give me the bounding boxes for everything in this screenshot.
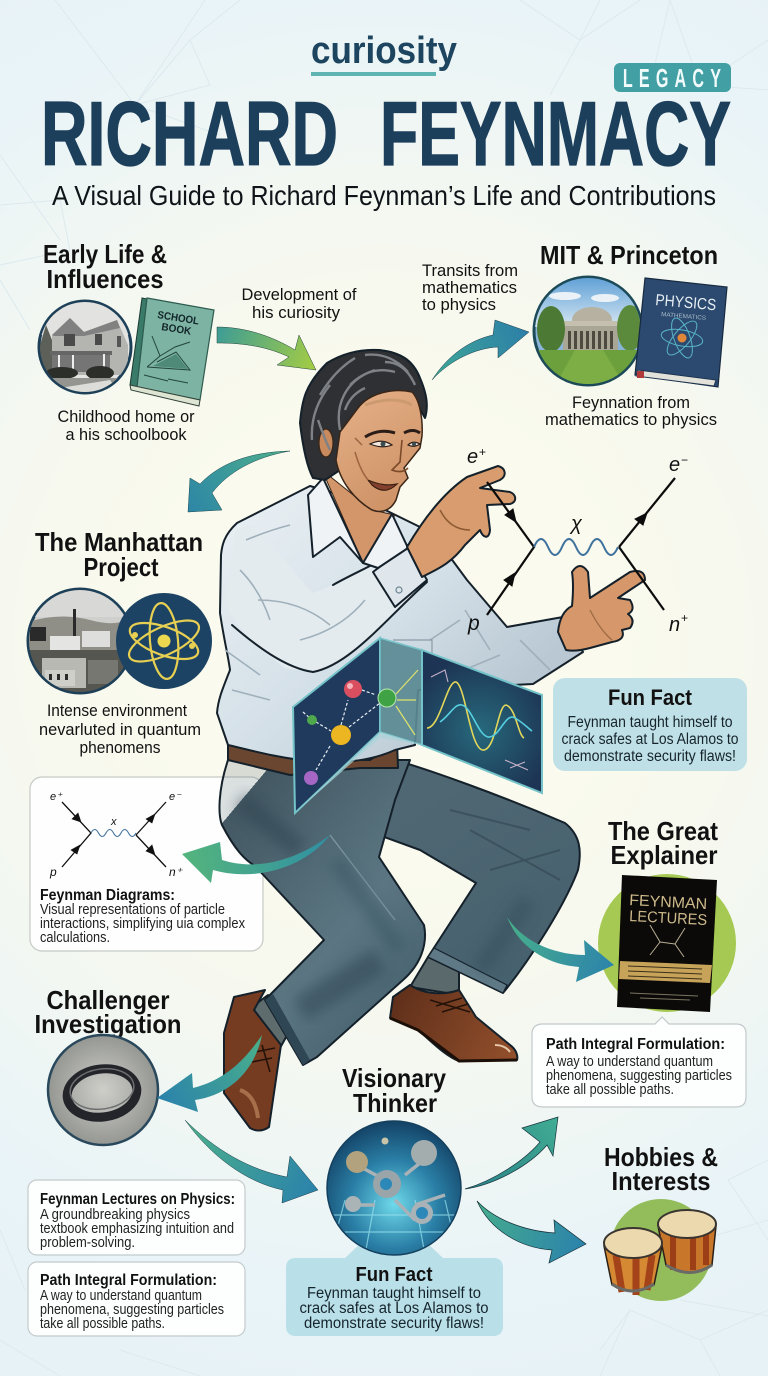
heading: visionary — [342, 1063, 446, 1118]
card: Path Integral Formulation right: take all possible paths. — [546, 1081, 674, 1098]
callout: fun fact lower — [286, 1242, 503, 1336]
hologram panel — [293, 638, 542, 813]
callout: fun fact upper: Fun Fact — [608, 685, 693, 710]
neck — [322, 470, 395, 563]
section: Manhattan Project — [28, 527, 212, 757]
icon: nanobot sphere — [327, 1121, 461, 1255]
card: Feynman Diagrams — [30, 777, 263, 951]
card: Feynman Lectures on Physics — [28, 1180, 245, 1255]
card: Feynman Lectures on Physics: A groundbreaking physics — [40, 1206, 190, 1223]
heading: visionary: Visionary — [342, 1063, 446, 1093]
belt — [228, 742, 398, 775]
near leg and foot — [220, 760, 425, 1130]
chart: large Feynman diagram: n — [669, 614, 680, 636]
caption: childhood home — [58, 407, 195, 444]
card: Path Integral Formulation left: A way to understand quantum — [40, 1287, 202, 1304]
far leg — [365, 760, 580, 1061]
caption: development of curiosity — [242, 285, 357, 322]
heading: great explainer: The Great — [608, 816, 718, 846]
caption: intense environment: phenomens — [80, 738, 160, 757]
chart: large Feynman diagram: + — [681, 611, 688, 625]
callout: fun fact lower: Fun Fact — [356, 1264, 433, 1286]
text: Feynman Diagrams description: Feynman Diagrams: — [40, 887, 175, 904]
caption: transits: to physics — [422, 295, 496, 314]
card: Path Integral Formulation right — [532, 1017, 746, 1107]
icon: bongo drums — [604, 1210, 716, 1295]
heading: visionary: Thinker — [353, 1088, 437, 1118]
icon: atom — [116, 593, 212, 689]
icon: Feynman Lectures book: FEYNMAN — [629, 892, 708, 913]
chart: large Feynman diagram: χ — [569, 513, 583, 535]
chart: large Feynman diagram: − — [681, 453, 688, 467]
caption: development of curiosity: Development of — [242, 285, 357, 304]
chart: small Feynman diagram: p — [49, 865, 57, 879]
icon: Feynman Lectures book: LECTURES — [629, 908, 708, 929]
callout: fun fact lower: crack safes at Los Alamos to — [300, 1300, 488, 1317]
upper hand — [407, 466, 515, 577]
chart: large Feynman diagram — [467, 445, 688, 636]
title: RICHARD — [41, 84, 338, 185]
chart: small Feynman diagram: e⁺ — [50, 791, 63, 803]
photo: Los Alamos site — [28, 589, 132, 693]
section: The Great Explainer — [598, 816, 736, 1012]
illustration: Richard Feynman figure — [217, 350, 688, 1130]
arrow: figure to Great Explainer — [507, 917, 614, 982]
heading: hobbies — [604, 1142, 718, 1196]
heading: great explainer: Explainer — [610, 840, 718, 870]
caption: intense environment: Intense environment — [47, 701, 187, 720]
photo: childhood home — [38, 300, 132, 394]
hair highlights — [312, 355, 415, 450]
lower hand — [558, 566, 645, 651]
section: MIT and Princeton — [530, 240, 727, 429]
caption: feynnation: mathematics to physics — [545, 410, 717, 429]
arrow: portrait to MIT — [432, 320, 529, 380]
badge: legacy: LEGACY — [623, 63, 727, 93]
section: early life and influences — [38, 239, 214, 444]
face — [319, 391, 422, 511]
heading: Manhattan: The Manhattan — [35, 527, 203, 557]
heading: Manhattan — [35, 527, 203, 582]
text: Feynman Diagrams description — [40, 887, 245, 946]
text: Feynman Diagrams description: Visual representations of particle — [40, 901, 225, 918]
heading: challenger: Investigation — [34, 1009, 182, 1039]
chart: small Feynman diagram: n⁺ — [169, 865, 184, 879]
section: Challenger Investigation — [28, 985, 245, 1336]
caption: transits: mathematics — [422, 278, 517, 297]
caption: childhood home: Childhood home or — [58, 407, 195, 426]
section: Hobbies and Interests — [604, 1142, 718, 1301]
callout: fun fact upper: Feynman taught himself to — [568, 714, 732, 731]
text: Feynman Diagrams description: interactions, simplifying uia complex — [40, 915, 245, 932]
text: Feynman Diagrams description: calculations. — [40, 929, 110, 946]
callout: fun fact lower: demonstrate security flaws! — [304, 1315, 484, 1332]
heading: Manhattan: Project — [84, 552, 159, 582]
caption: transits: Transits from — [422, 261, 518, 280]
callout: fun fact upper — [553, 678, 747, 771]
heading: hobbies: Interests — [612, 1166, 710, 1196]
icon: green disc — [610, 1199, 712, 1301]
icon: school book — [130, 298, 214, 406]
heading: challenger — [34, 985, 182, 1039]
heading: challenger: Challenger — [46, 985, 170, 1015]
logo: curiosity: curiosity — [311, 30, 457, 72]
card: Path Integral Formulation left: phenomena, suggesting particles — [40, 1301, 224, 1318]
collar — [308, 478, 408, 568]
caption: childhood home: a his schoolbook — [66, 425, 187, 444]
arrow: early life to portrait — [217, 327, 316, 370]
caption: transits — [422, 261, 518, 314]
icon: Feynman Lectures book — [617, 875, 717, 1012]
callout: fun fact upper: crack safes at Los Alamos to — [562, 731, 738, 748]
arrow: figure to Feynman Diagrams card — [182, 835, 330, 883]
caption: feynnation — [545, 393, 717, 429]
card: Feynman Lectures on Physics: Feynman Lectures on Physics: — [40, 1191, 235, 1208]
heading: hobbies: Hobbies & — [604, 1142, 718, 1172]
card: Feynman Lectures on Physics: problem-solving. — [40, 1234, 135, 1251]
caption: development of curiosity: his curiosity — [252, 303, 340, 322]
heading: great explainer — [608, 816, 718, 870]
icon: school book: BOOK — [161, 321, 192, 338]
card: Path Integral Formulation right: phenomena, suggesting particles — [546, 1067, 732, 1084]
icon: physics book: MATHEMATICS — [661, 312, 706, 322]
callout: fun fact lower: Feynman taught himself to — [307, 1285, 481, 1302]
chart: large Feynman diagram: e — [467, 446, 478, 468]
icon: green disc — [598, 874, 736, 1012]
icon: physics book — [635, 278, 727, 387]
arrow: Visionary to Path Integral card — [465, 1117, 558, 1189]
card: Path Integral Formulation right: A way to understand quantum — [546, 1053, 713, 1070]
caption: intense environment: nevarluted in quantum — [39, 720, 201, 739]
section: Visionary Thinker — [286, 1063, 503, 1336]
card: Path Integral Formulation left: Path Integral Formulation: — [40, 1272, 217, 1289]
callout: fun fact upper: demonstrate security flaws! — [564, 748, 736, 765]
chart: small Feynman diagram: x — [110, 816, 117, 828]
arrow: portrait to Manhattan Project — [188, 451, 290, 512]
icon: physics book: PHYSICS — [655, 292, 717, 314]
caption: intense environment — [39, 701, 201, 757]
chart: large Feynman diagram: p — [467, 612, 480, 635]
caption: feynnation: Feynnation from — [572, 393, 690, 412]
card: Path Integral Formulation right: Path Integral Formulation: — [546, 1036, 725, 1053]
chart: small Feynman diagram: e⁻ — [169, 791, 182, 803]
photo: MIT dome — [530, 277, 646, 386]
chart: small Feynman diagram — [49, 791, 184, 879]
title — [41, 84, 731, 185]
heading: early life: Early Life & — [43, 239, 167, 269]
card: Feynman Lectures on Physics: textbook emphasizing intuition and — [40, 1220, 234, 1237]
chart: large Feynman diagram: + — [479, 445, 486, 459]
chart: large Feynman diagram: e — [669, 454, 680, 476]
heading: early life — [43, 239, 167, 294]
shirt — [217, 486, 583, 762]
icon: O-ring photo — [48, 1035, 158, 1145]
heading: early life: Influences — [46, 264, 164, 294]
arrow: Visionary to Hobbies — [477, 1201, 586, 1263]
arrow: shoe to Challenger — [157, 1035, 262, 1112]
arrow: Challenger to Visionary Thinker — [185, 1120, 318, 1203]
hair back — [300, 350, 427, 480]
icon: school book: SCHOOL — [157, 309, 200, 328]
heading: MIT: MIT & Princeton — [540, 240, 718, 270]
card: Path Integral Formulation left: take all possible paths. — [40, 1315, 165, 1332]
card: Path Integral Formulation left — [28, 1262, 245, 1336]
